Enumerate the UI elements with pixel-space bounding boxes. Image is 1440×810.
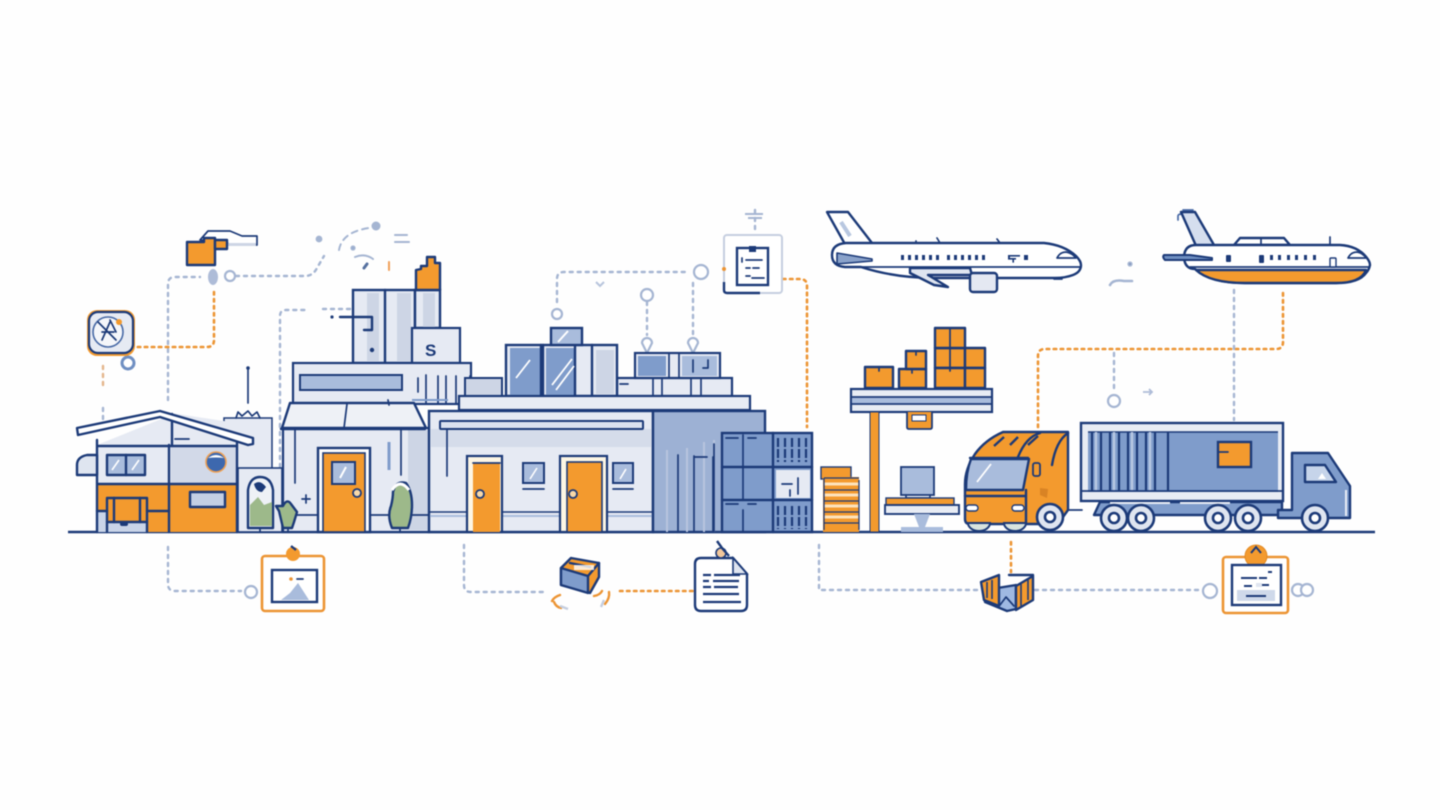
container trailer and rear cab	[1081, 423, 1350, 531]
factory stacks	[330, 257, 460, 363]
warehouse facade	[429, 411, 653, 532]
rooftop low boxes	[465, 353, 732, 396]
shelf platform	[851, 389, 992, 532]
chassis	[1094, 502, 1282, 515]
icon: parcel box with brackets	[552, 558, 609, 609]
crate stack	[722, 433, 812, 532]
shrubs and figures	[248, 477, 412, 532]
wheels	[1101, 505, 1328, 531]
left warehouse house	[77, 366, 282, 532]
rear cab	[1278, 453, 1350, 518]
windows	[523, 463, 633, 489]
container	[1081, 423, 1283, 501]
back service building	[224, 366, 282, 532]
house body	[77, 411, 253, 532]
awning and ground floor	[281, 400, 429, 532]
roof slab	[459, 396, 750, 410]
door right	[560, 456, 607, 532]
factory building center left	[281, 257, 471, 532]
orange crate pile	[821, 467, 859, 532]
rooftop tanks	[506, 328, 617, 396]
stacked cartons	[865, 328, 985, 388]
icon: document with clip	[695, 541, 747, 611]
factory stacks: S	[425, 341, 436, 360]
floating signal marks above factory	[317, 222, 1132, 285]
ground line	[68, 531, 1375, 533]
main warehouse center	[429, 328, 812, 532]
airplane white	[827, 212, 1081, 292]
connector nodes: rings and pins	[122, 265, 1313, 598]
icon: picture card with orange frame	[262, 546, 324, 611]
upper band	[293, 363, 471, 404]
airplane orange belly	[1163, 210, 1370, 283]
door left	[467, 456, 502, 532]
icon: form card with orange pin	[1223, 545, 1288, 613]
connector network: dashed links	[103, 210, 1283, 592]
truck cab orange	[965, 432, 1082, 531]
icon: clipboard card top	[722, 214, 782, 293]
blue side bay	[653, 411, 765, 532]
desk and monitor	[885, 467, 959, 532]
icon: open box	[981, 575, 1033, 611]
icon: gauge clock	[87, 310, 135, 356]
icon: folder with delivery plane	[187, 231, 257, 265]
shelf with boxes	[851, 328, 992, 532]
